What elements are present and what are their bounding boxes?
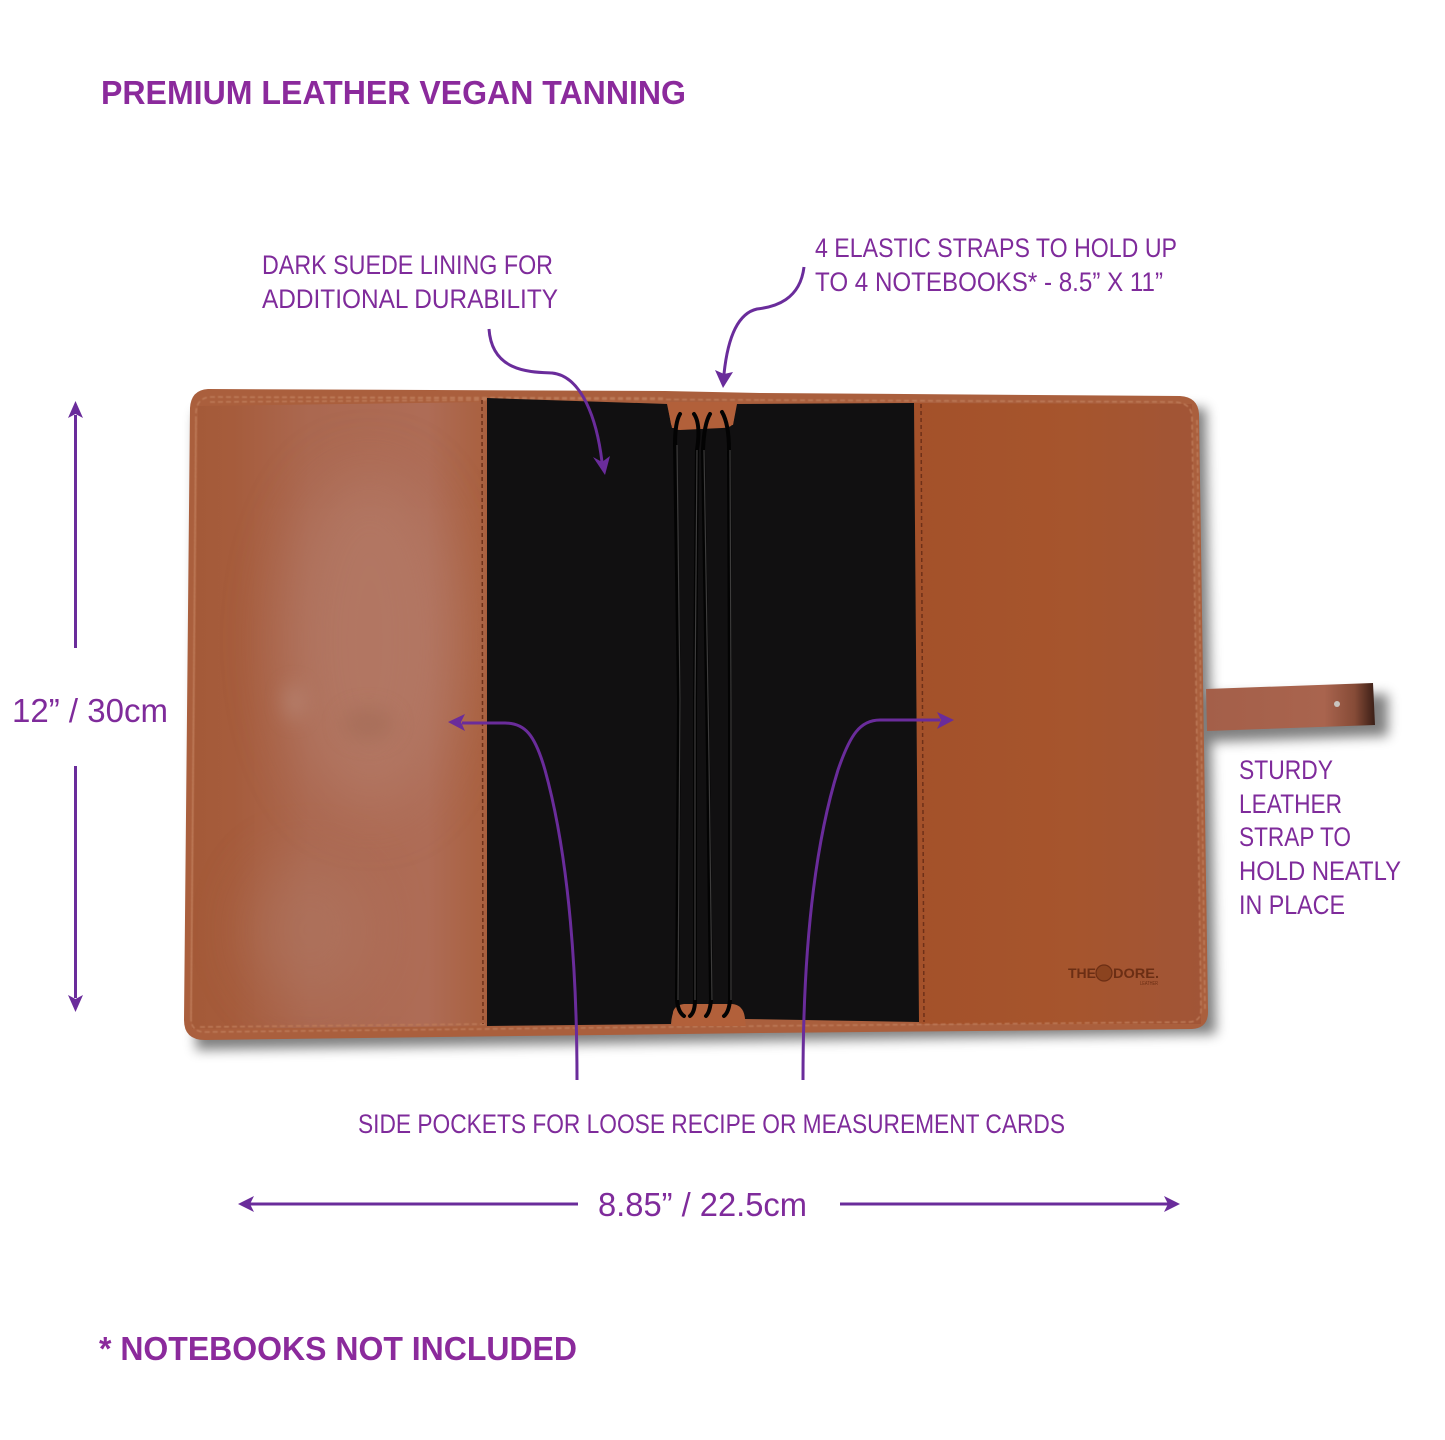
callout: leather strap: IN PLACE bbox=[1239, 890, 1345, 920]
pocket seam stitching bbox=[482, 400, 924, 1024]
callout: leather strap: HOLD NEATLY bbox=[1239, 856, 1401, 886]
arrow: right side pocket bbox=[803, 712, 954, 1080]
dark blotch bbox=[360, 719, 376, 729]
callout: elastic straps: 4 ELASTIC STRAPS TO HOLD UP bbox=[815, 233, 1177, 263]
callout: suede lining: ADDITIONAL DURABILITY bbox=[262, 284, 558, 314]
upper highlight bbox=[285, 470, 455, 810]
width dimension: 8.85” / 22.5cm bbox=[598, 1186, 807, 1223]
arrow: suede lining bbox=[489, 329, 610, 475]
callout: leather strap: STRAP TO bbox=[1239, 822, 1351, 852]
callout: leather strap: STURDY bbox=[1239, 755, 1333, 785]
title: PREMIUM LEATHER VEGAN TANNING bbox=[101, 74, 686, 111]
light spot bbox=[285, 684, 303, 720]
height dimension bbox=[12, 401, 168, 1012]
debossed logo: DORE. bbox=[1113, 965, 1159, 981]
debossed logo bbox=[1068, 965, 1159, 987]
product photo: open leather cover bbox=[184, 389, 1388, 1050]
debossed logo: THE bbox=[1068, 965, 1096, 981]
bottom tab bbox=[672, 1004, 746, 1026]
arrow: elastic straps bbox=[715, 267, 804, 388]
callout: leather strap: LEATHER bbox=[1239, 789, 1342, 819]
callout: elastic straps: TO 4 NOTEBOOKS* - 8.5” X 11” bbox=[815, 267, 1163, 297]
top tab bbox=[667, 402, 737, 430]
cover outline bbox=[184, 389, 1208, 1040]
callout: leather strap bbox=[1239, 755, 1401, 920]
left pocket mottling bbox=[250, 470, 455, 1000]
lower highlight bbox=[254, 882, 340, 978]
height dimension: 12” / 30cm bbox=[12, 692, 168, 729]
callout: suede lining: DARK SUEDE LINING FOR bbox=[262, 250, 553, 280]
arrow: left side pocket bbox=[448, 714, 577, 1080]
callout: elastic straps bbox=[815, 233, 1177, 297]
right pocket bbox=[914, 403, 1201, 1024]
callout: side pockets: SIDE POCKETS FOR LOOSE RECIPE OR MEASUREMENT CARDS bbox=[358, 1109, 1065, 1139]
left pocket bbox=[192, 402, 486, 1029]
dark suede lining bbox=[487, 398, 919, 1026]
width dimension bbox=[238, 1186, 1180, 1223]
elastic straps bbox=[675, 412, 730, 1016]
debossed logo: LEATHER bbox=[1140, 981, 1158, 987]
footnote: * NOTEBOOKS NOT INCLUDED bbox=[99, 1330, 577, 1367]
callout: suede lining bbox=[262, 250, 558, 314]
strap bbox=[1206, 683, 1375, 731]
elastic highlights bbox=[677, 445, 731, 1000]
stitching bbox=[191, 397, 1205, 1032]
cover drop shadow bbox=[196, 408, 1388, 1050]
